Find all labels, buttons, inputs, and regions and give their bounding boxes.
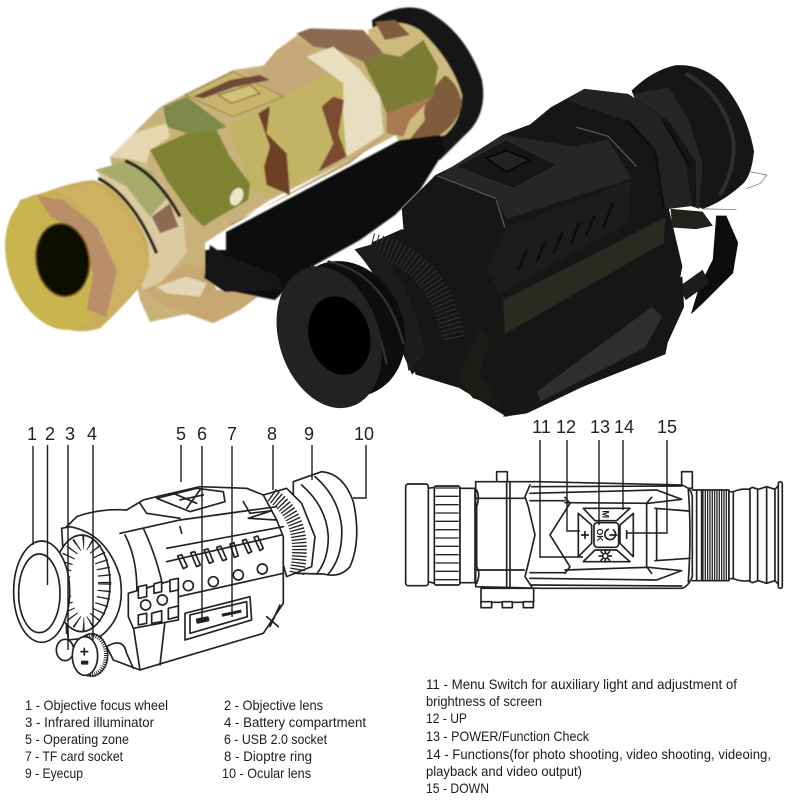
side vent slots: [178, 536, 263, 569]
camo carry strap fabric: [205, 135, 445, 300]
legend: parts 1 to 10, first column: 9 - Eyecup: [25, 765, 83, 781]
callout line 9: [311, 445, 313, 480]
control panel buttons: [173, 490, 203, 508]
black front barrel: [371, 229, 473, 374]
USB socket: [196, 616, 210, 624]
black main body: [402, 89, 696, 417]
dioptre ring: [263, 488, 315, 577]
callout numbers 1 to 10: 1: [27, 424, 37, 444]
black buckle connector: [679, 270, 709, 300]
legend: parts 11 to 15: 11 - Menu Switch for auxiliary light and adjustment of: [426, 676, 737, 692]
callout numbers 1 to 10: 4: [87, 424, 97, 444]
camo eyecup outer: [10, 180, 149, 331]
legend: parts 1 to 10, second column: 4 - Battery compartment: [224, 714, 366, 730]
camo eyecup side ring: [50, 183, 150, 323]
centre button: [594, 523, 619, 547]
camo patch: green front block: [150, 130, 250, 227]
black side ribs: [518, 202, 613, 270]
callout line 7: [231, 446, 233, 617]
body seams: [120, 507, 283, 670]
black lens hole: [299, 289, 380, 382]
camo patch: tan shoulder: [243, 38, 333, 97]
camouflage rear barrel patches: [375, 20, 462, 145]
small illuminator lens: [56, 639, 74, 661]
legend: parts 1 to 10, second column: 6 - USB 2.0 socket: [224, 731, 327, 747]
control panel: [157, 488, 225, 512]
socket inner frame: [190, 602, 247, 633]
objective inner lens: [19, 554, 60, 633]
objective end: [406, 484, 428, 586]
legend: parts 1 to 10, first column: 3 - Infrared illuminator: [25, 714, 154, 730]
black webbing band: [503, 217, 665, 334]
callout line 3: [67, 445, 69, 650]
side screw holes: [183, 564, 267, 591]
camo patch: cream front: [110, 123, 170, 163]
brightness icon: [599, 550, 611, 562]
bellows seams: [733, 487, 775, 583]
camo knurled front barrel: [97, 162, 187, 290]
black rear eyecup rib: [686, 74, 734, 195]
black centre button: [486, 151, 530, 172]
battery dial side: [76, 634, 108, 676]
top spike ridge: [530, 490, 682, 503]
socket panel: [185, 597, 252, 640]
power icon: [605, 529, 617, 540]
callout line 6: [201, 446, 203, 620]
callout line 1: [32, 446, 34, 545]
callout numbers 1 to 10: 2: [45, 424, 55, 444]
control plate right detail: [647, 497, 690, 573]
control plate chevron: [550, 497, 570, 573]
OK label: OK: [595, 528, 605, 542]
callout numbers 1 to 10: [27, 424, 374, 444]
side rail mount: [128, 578, 178, 628]
right line diagram with callouts: [406, 417, 782, 608]
objective focus ring: [434, 486, 460, 585]
black rear eyecup: [632, 65, 754, 209]
black hand strap inner panel: [537, 307, 662, 402]
camo patch: cream stripe: [307, 47, 383, 157]
callout line 8: [272, 445, 274, 490]
callout numbers 1 to 10: 6: [197, 424, 207, 444]
bottom rail mount: [481, 588, 534, 608]
camo centre button: [218, 85, 260, 103]
photo: camouflage monocular: [0, 8, 483, 343]
callout numbers 1 to 10: 7: [227, 424, 237, 444]
callout numbers 11 to 15: 15: [657, 417, 677, 437]
minus icon: [624, 531, 629, 538]
black top face: [439, 134, 632, 219]
dioptre ring knurl: [272, 495, 299, 574]
plus icon: [582, 532, 588, 538]
eyecup and ocular lens: [293, 472, 357, 575]
battery dial face: [72, 637, 98, 675]
black eyecup face: [259, 253, 399, 422]
black outer buttons: [456, 140, 557, 189]
camo eyecup brown wedge: [37, 195, 117, 317]
legend: parts 11 to 15: 12 - UP: [426, 710, 467, 726]
camo patch: right brown blob: [318, 97, 347, 172]
bottom spike ridge: [530, 567, 682, 580]
callout numbers 11 to 15: 13: [590, 417, 610, 437]
black barrel knurl: [371, 244, 454, 341]
legend: parts 1 to 10, second column: 10 - Ocular lens: [222, 765, 311, 781]
black eyecup side: [267, 243, 425, 415]
callout line 11: [540, 440, 583, 557]
legend: parts 1 to 10, first column: 5 - Operating zone: [25, 731, 129, 747]
camo patch: dark brown blob: [258, 106, 290, 195]
callout numbers 1 to 10: 8: [267, 424, 277, 444]
legend: parts 1 to 10, first column: 1 - Objective focus wheel: [25, 697, 168, 713]
camouflage rear eyecup: [372, 8, 483, 160]
camo band: green collar: [363, 40, 438, 113]
ring collar: [460, 488, 475, 583]
camouflage rear barrel: [368, 22, 462, 145]
callout line 10: [353, 445, 366, 498]
legend: parts 1 to 10, second column: 2 - Objective lens: [224, 697, 323, 713]
black button pad: [456, 140, 557, 189]
legend: parts 11 to 15: 15 - DOWN: [426, 780, 489, 796]
callout line 5: [180, 445, 182, 482]
camo control panel: [185, 72, 283, 117]
body outline: [63, 487, 283, 670]
monocular side view drawing: [14, 472, 357, 676]
legend: parts 1 to 10, second column: [222, 697, 366, 781]
camo lower belly: [143, 263, 267, 323]
camo patch: lower tan: [230, 133, 387, 227]
operating zone top ridges: [140, 502, 277, 520]
eyepiece collar: [692, 490, 702, 581]
focus ring: [53, 535, 110, 632]
callout line 14: [622, 440, 624, 510]
legend: parts 11 to 15: 14 - Functions(for photo shooting, video shooting, videoing,: [426, 746, 771, 762]
callout line 4: [92, 445, 94, 640]
callout line 12: [567, 440, 580, 531]
monocular top view drawing: [406, 472, 782, 608]
legend: parts 11 to 15: [426, 676, 771, 796]
photo: black monocular: [259, 65, 767, 422]
callout numbers 1 to 10: 9: [304, 424, 314, 444]
camo band: brown lower collar: [387, 97, 433, 137]
black rear collar: [567, 89, 692, 209]
eyepiece bellows: [729, 485, 779, 585]
black side face: [486, 180, 632, 293]
black silver edge highlights: [437, 127, 637, 227]
camo panel brown mark: [193, 75, 270, 98]
callout numbers 11 to 15: 11: [532, 417, 551, 437]
camo eyecup face: [0, 180, 122, 343]
callout numbers 11 to 15: [532, 417, 677, 437]
focus ring housing: [62, 527, 121, 640]
battery dial plus: [81, 648, 88, 655]
camo barrel black seam: [98, 161, 180, 253]
lower dial body curve: [107, 643, 133, 668]
bottom button: [583, 550, 630, 562]
legend: parts 11 to 15: playback and video output): [426, 763, 582, 779]
black rear barrel ring: [633, 87, 703, 209]
callout numbers 11 to 15: 12: [556, 417, 576, 437]
black rear collar seam: [628, 119, 689, 209]
legend: parts 1 to 10, first column: 7 - TF card socket: [25, 748, 123, 764]
camo barrel green band: [95, 161, 168, 217]
black front shoulder: [402, 175, 507, 270]
black eyecup ribs: [311, 261, 404, 364]
black buckle: [691, 216, 738, 314]
objective outer ring: [14, 541, 70, 642]
battery dial minus: [81, 661, 88, 665]
dioptre ring: [702, 490, 729, 581]
left line diagram with callouts: [14, 424, 374, 676]
callout numbers 1 to 10: 5: [176, 424, 186, 444]
body horizontal seams: [477, 486, 690, 586]
black hand strap pad: [503, 276, 684, 417]
M label: M: [600, 510, 610, 518]
left button: [578, 513, 592, 557]
eyecup inner rim: [302, 477, 342, 574]
camo band: brown collar: [297, 28, 383, 62]
TF card socket: [222, 610, 242, 617]
black barrel collar: [354, 244, 425, 371]
callout line 13: [598, 440, 600, 525]
camouflage body silhouette: [110, 30, 405, 322]
objective shoulder: [428, 487, 434, 583]
legend: parts 1 to 10, second column: 8 - Dioptre ring: [224, 748, 312, 764]
callout numbers 11 to 15: 14: [614, 417, 634, 437]
camo white mark: [227, 186, 246, 208]
legend: parts 11 to 15: 13 - POWER/Function Check: [426, 728, 590, 744]
dioptre ring knurl: [702, 401, 728, 669]
legend: parts 1 to 10, first column: [25, 697, 168, 781]
black lower webbing loop: [458, 327, 503, 408]
camo lens hole: [31, 220, 94, 300]
callout numbers 1 to 10: 3: [65, 424, 75, 444]
black stray threads: [703, 172, 767, 210]
camo webbing strap: [204, 245, 283, 292]
menu button up: [583, 508, 630, 521]
focus ring knurl: [63, 543, 105, 624]
callout line 2: [46, 445, 48, 585]
body chevron edge: [525, 485, 535, 587]
battery dial knurl: [77, 635, 106, 675]
focus ring knurl: [412, 487, 482, 584]
right button: [620, 513, 633, 557]
callout numbers 1 to 10: 10: [354, 424, 374, 444]
legend: parts 11 to 15: brightness of screen: [426, 693, 542, 709]
camo patch: yellow top: [227, 70, 350, 197]
camo patch: upper green: [163, 97, 227, 133]
camo belly cream patch: [157, 277, 207, 297]
callout line 15: [627, 440, 667, 533]
eyecup end: [778, 482, 782, 588]
body vertical seams: [477, 482, 510, 588]
camo barrel brown patch: [152, 203, 178, 233]
top rail tabs: [497, 472, 692, 488]
black strap right end: [671, 209, 713, 229]
main body: [476, 482, 692, 588]
